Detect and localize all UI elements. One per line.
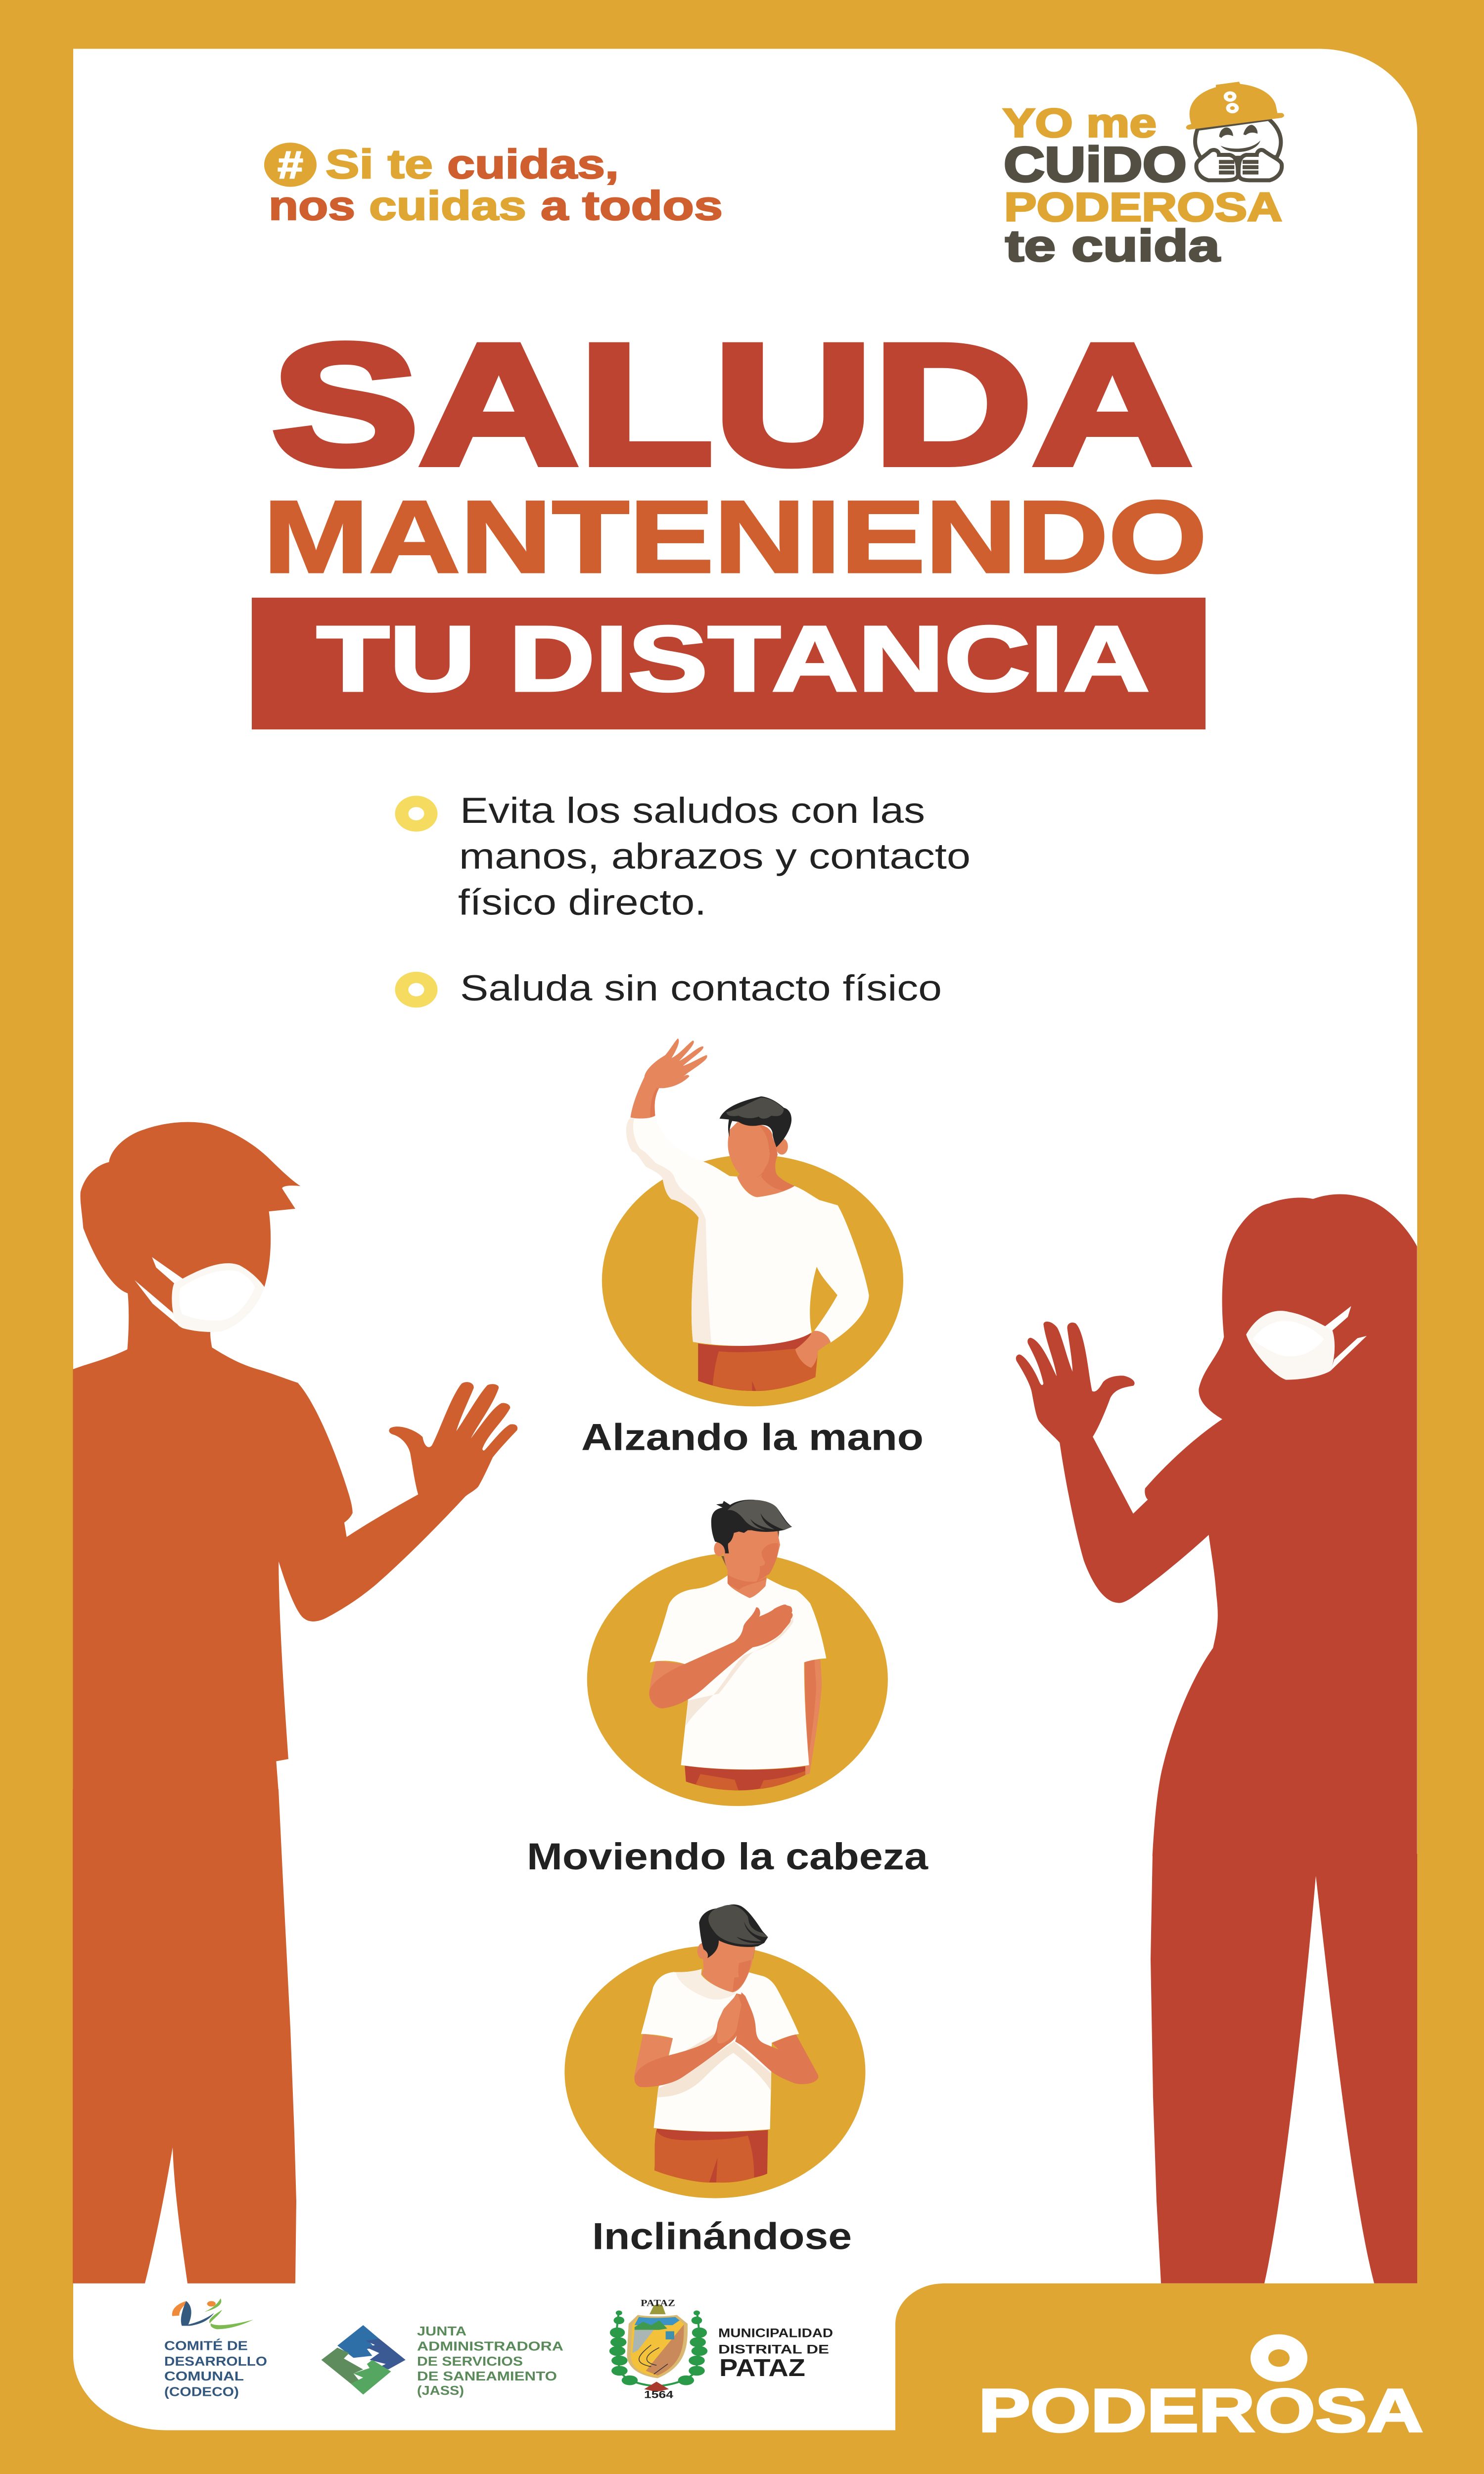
icon: poderosa ring (1251, 2334, 1307, 2382)
label: inclinandose: Inclinándose (592, 2215, 852, 2257)
text: jass (417, 2324, 563, 2398)
title banner: tu distancia (252, 598, 1206, 729)
slogan line 2: a (541, 183, 569, 229)
logo: poderosa (978, 2334, 1423, 2444)
icon: hashtag circle (264, 143, 317, 187)
text: jass: DE SERVICIOS (417, 2354, 523, 2369)
bullet list (395, 790, 971, 1008)
text: municipalidad: PATAZ (719, 2354, 805, 2381)
logo: codeco (164, 2298, 267, 2399)
bullet 2: Saluda sin contacto físico (460, 968, 942, 1008)
bullet 1 (395, 790, 971, 923)
illustration: man nodding with hand on chest (587, 1500, 888, 1806)
logo text: CUiDO (1004, 137, 1187, 192)
text: jass: JUNTA (417, 2324, 466, 2339)
logo text: PODEROSA (1004, 185, 1282, 230)
text: municipalidad: DISTRITAL DE (718, 2342, 829, 2356)
logo text: YO me (1003, 101, 1157, 146)
text: codeco: COMITÉ DE (164, 2338, 248, 2353)
icon: hashtag circle: # (278, 144, 303, 187)
text: codeco: COMUNAL (164, 2369, 244, 2384)
text: codeco: (CODECO) (164, 2385, 239, 2399)
logo: jass (322, 2324, 563, 2398)
text: municipalidad (718, 2326, 833, 2381)
bullet 1: manos, abrazos y contacto (459, 836, 971, 877)
slogan line 2 (269, 183, 723, 229)
slogan: si te cuidas (264, 142, 723, 229)
label: moviendo la cabeza: Moviendo la cabeza (527, 1835, 928, 1877)
slogan line 1: cuidas, (447, 142, 619, 187)
icon: mascot with helmet (1186, 82, 1284, 180)
logo: yo me cuido poderosa te cuida (1003, 82, 1284, 271)
slogan line 2: nos (269, 183, 355, 229)
illustration: man bowing with hands together (564, 1904, 865, 2198)
title banner: tu distancia: TU DISTANCIA (317, 607, 1150, 711)
text: year 1564: 1564 (644, 2388, 673, 2400)
logo text (1003, 101, 1282, 271)
title: manteniendo: MANTENIENDO (263, 480, 1207, 594)
icon: puzzle diamond (322, 2325, 406, 2395)
label: alzando la mano: Alzando la mano (581, 1416, 924, 1458)
slogan line 1 (325, 142, 619, 187)
slogan line 2: todos (582, 183, 723, 229)
slogan line 1: Si te (325, 142, 433, 187)
slogan line 2: cuidas (369, 183, 526, 229)
text: municipalidad: MUNICIPALIDAD (718, 2326, 833, 2340)
panel: gold corner (895, 2284, 1484, 2474)
logo: municipalidad de pataz (609, 2298, 833, 2400)
text: jass: DE SANEAMIENTO (417, 2369, 557, 2384)
illustration: man raising hand (602, 1039, 903, 1406)
bullet 1: Evita los saludos con las (460, 790, 925, 831)
silhouette: left person with mask (73, 1122, 517, 2284)
text: codeco: DESARROLLO (164, 2354, 267, 2369)
silhouette: right person with mask (1016, 1194, 1417, 2284)
icon: coat of arms (609, 2304, 707, 2392)
icon: codeco swooshes (172, 2298, 253, 2329)
text: jass: ADMINISTRADORA (417, 2339, 563, 2354)
logo text: te cuida (1005, 221, 1220, 271)
text: codeco (164, 2338, 267, 2399)
title: saluda: SALUDA (272, 308, 1192, 500)
text: jass: (JASS) (417, 2383, 464, 2398)
bullet 1: físico directo. (458, 882, 706, 923)
text: poderosa: PODEROSA (978, 2377, 1423, 2444)
text: pataz crest: PATAZ (641, 2298, 675, 2308)
